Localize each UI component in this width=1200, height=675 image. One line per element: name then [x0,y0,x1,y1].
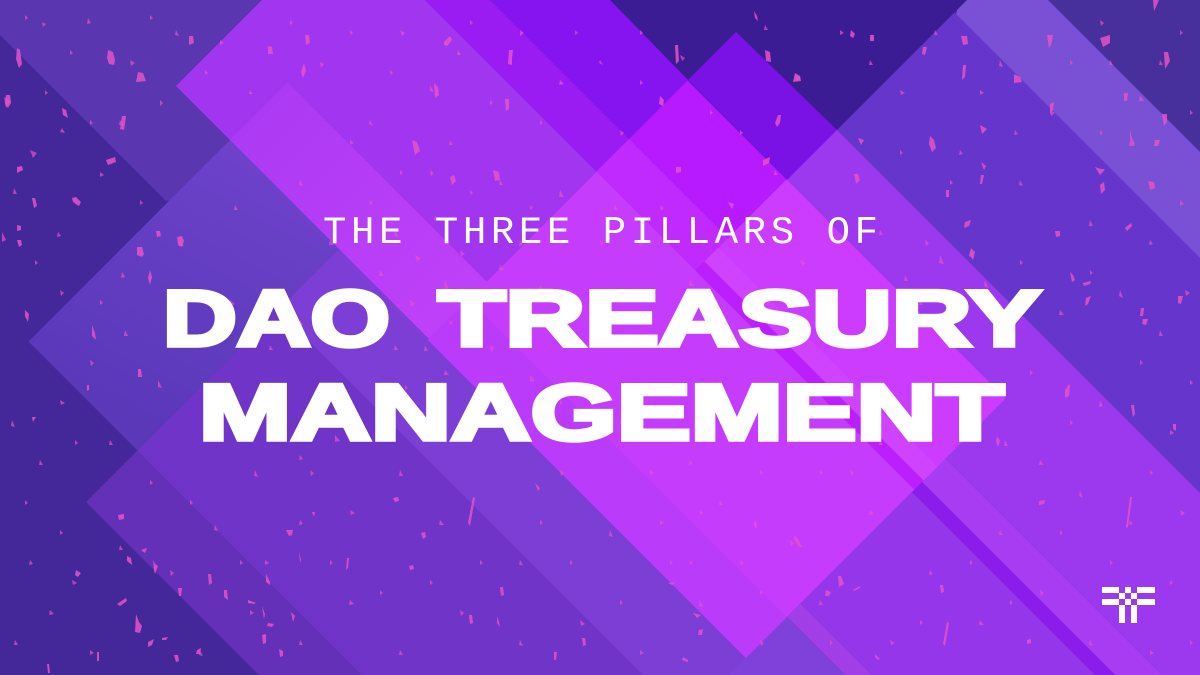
icon: logo mark [1102,587,1155,623]
title line 1: DAO [163,274,390,363]
title [163,274,1041,457]
title line 2: MANAGEMENT [199,368,1004,457]
title line 1 [163,274,1041,363]
title line 1: TREASURY [438,274,1041,363]
subtitle: THE THREE PILLARS OF [323,211,878,255]
